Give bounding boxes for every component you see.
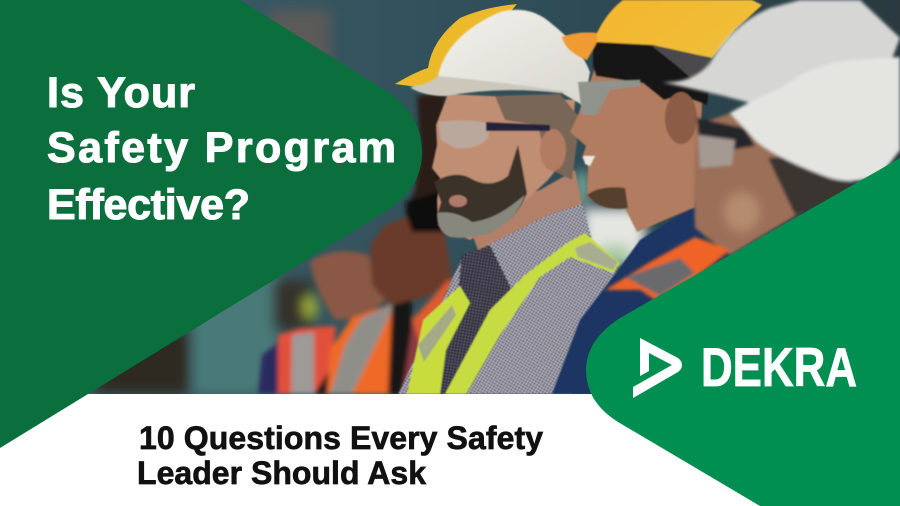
blurred coworkers on the left	[258, 92, 455, 394]
title	[47, 69, 396, 229]
blurred workers on the right	[605, 0, 900, 300]
bright green logo panel	[586, 158, 900, 506]
title: Effective?	[47, 181, 250, 229]
subtitle: 10 Questions Every Safety	[139, 420, 543, 456]
blurred background	[95, 10, 645, 394]
title: Safety Program	[47, 124, 396, 172]
white bottom band	[0, 394, 900, 506]
logo wordmark: DEKRA	[701, 336, 857, 398]
subtitle	[137, 420, 543, 491]
photo: workers in hard hats	[0, 0, 900, 394]
DEKRA logo	[633, 336, 857, 398]
dark green title panel	[0, 0, 422, 448]
title: Is Your	[47, 69, 195, 117]
man in white hard hat	[398, 10, 620, 394]
yellow hard hat, back worker	[395, 4, 517, 90]
smiling man in yellow hard hat	[552, 0, 762, 394]
subtitle: Leader Should Ask	[137, 455, 426, 491]
icon: DEKRA arrow mark	[633, 338, 682, 398]
